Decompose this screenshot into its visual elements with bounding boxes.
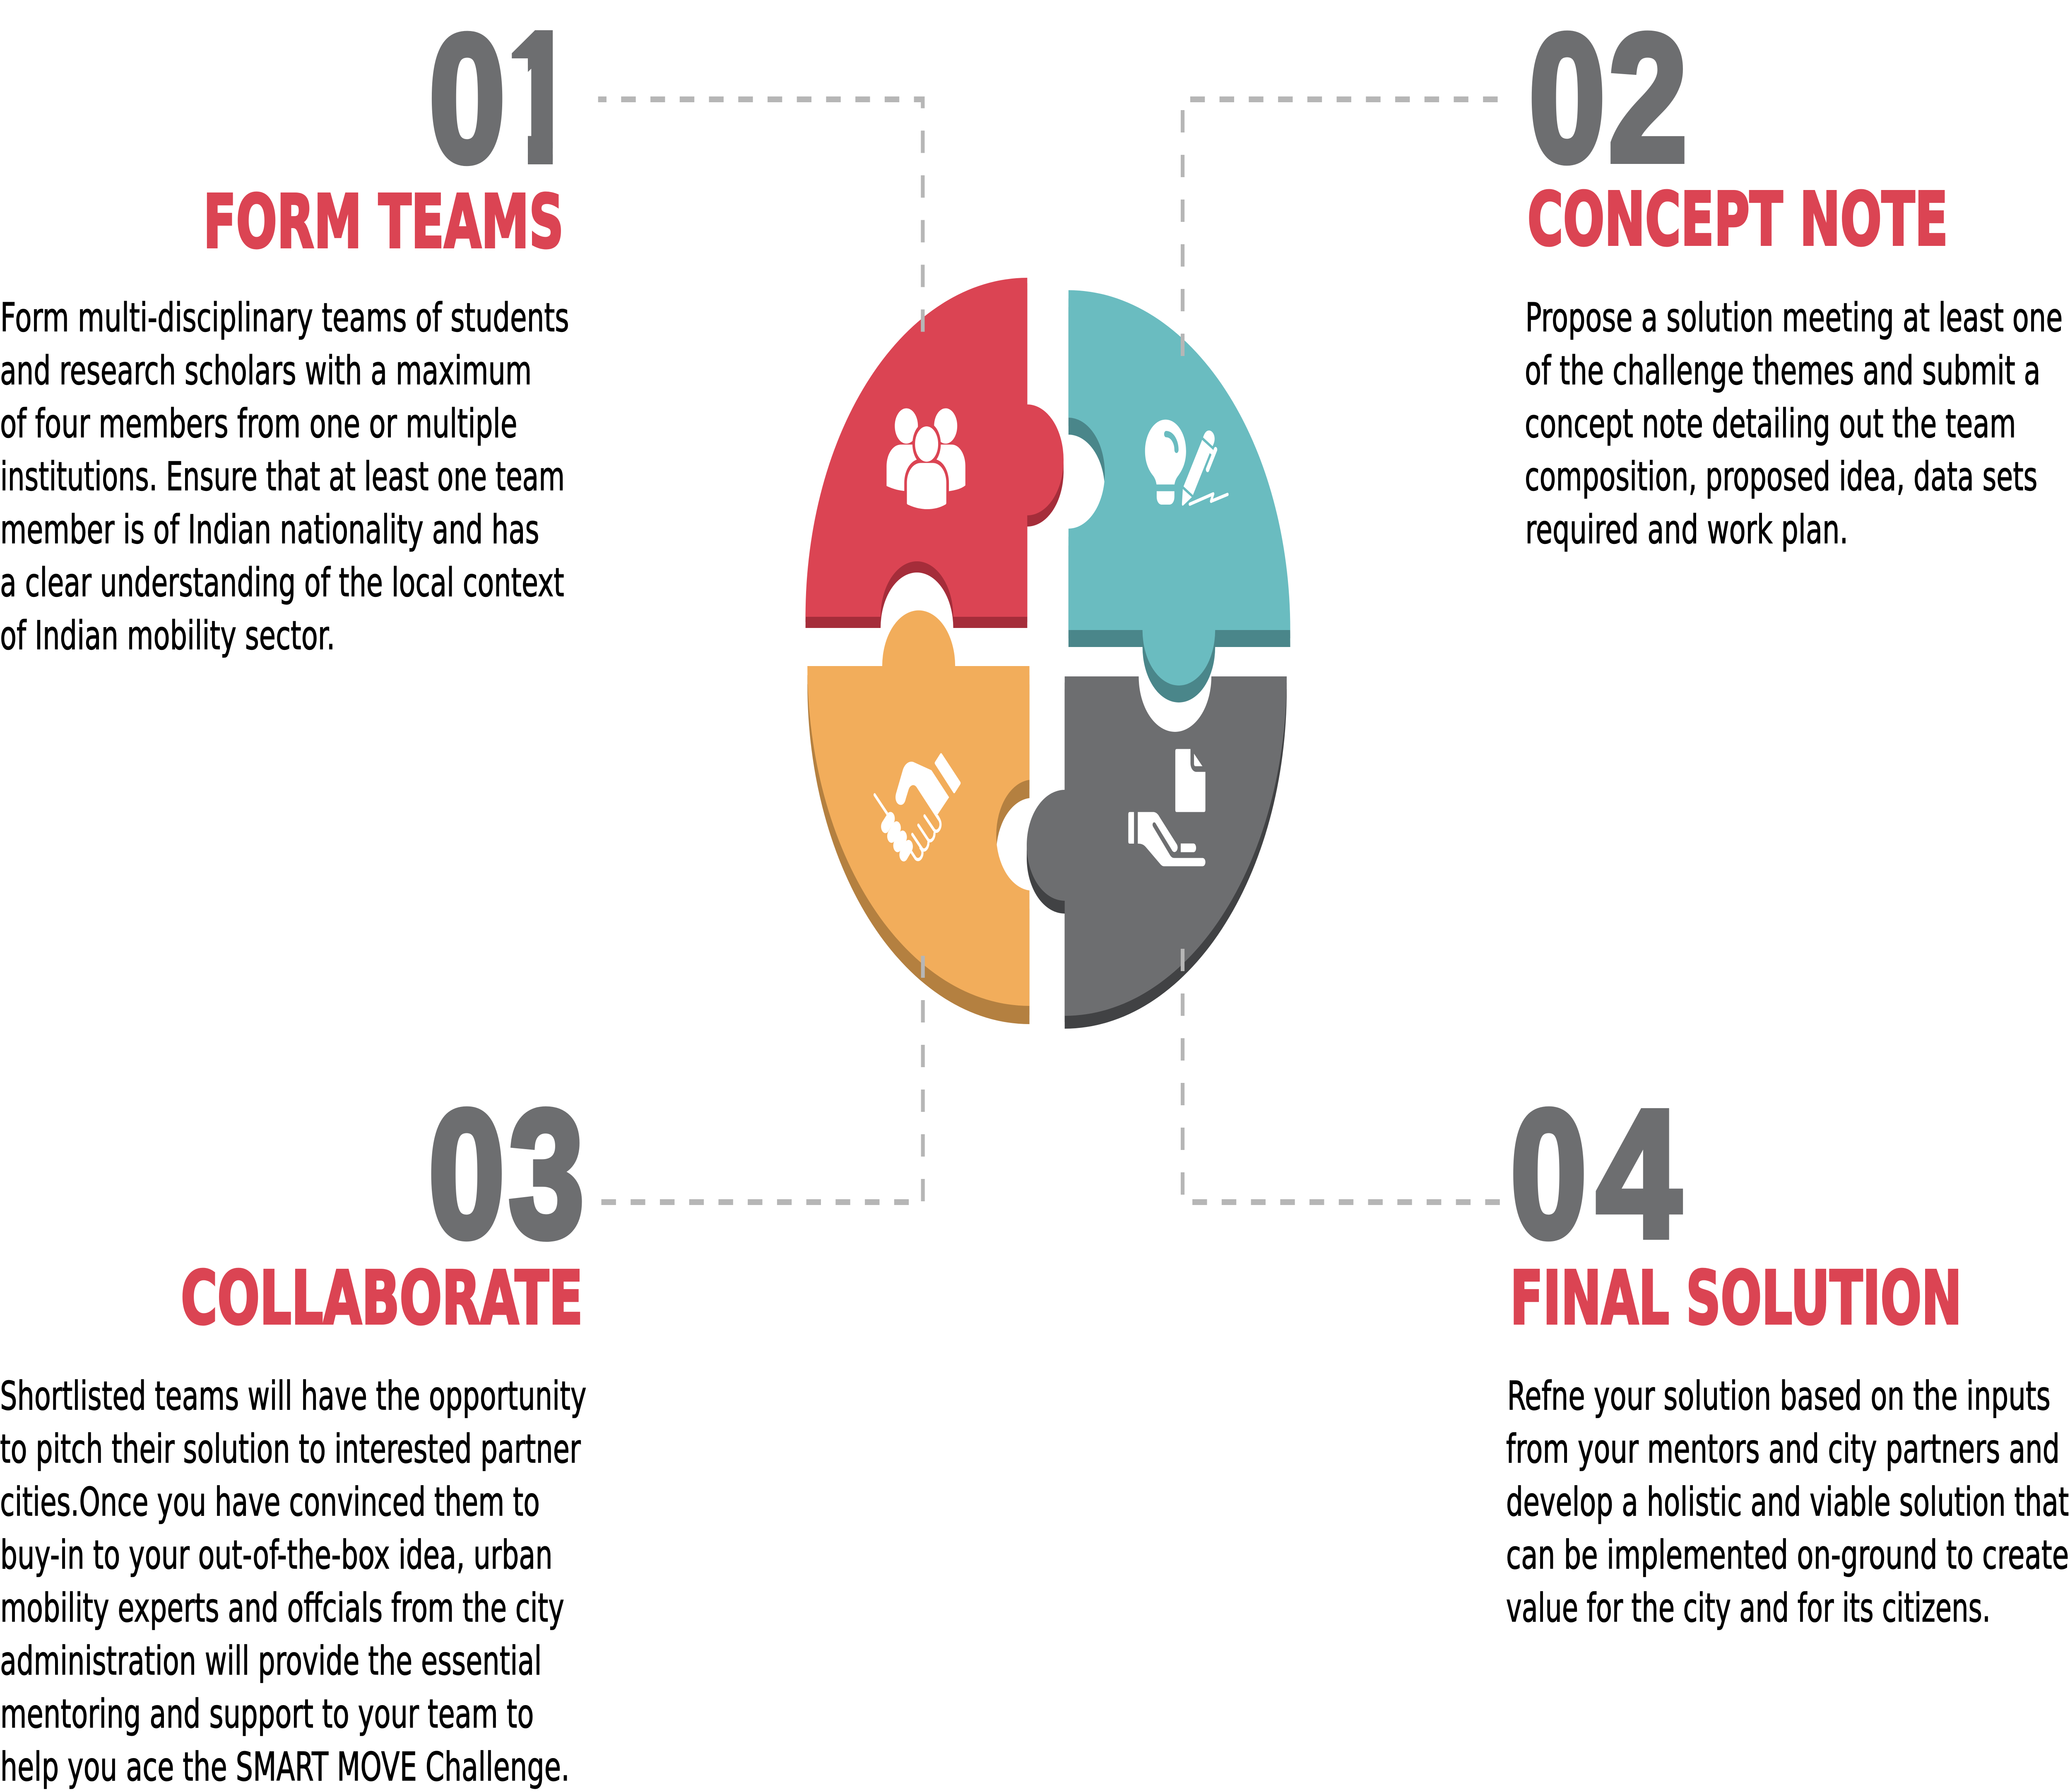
icon: team of three people [886, 408, 965, 509]
text block: collaborate description: mobility experts and offcials from the city [0, 1585, 564, 1631]
heading: collaborate: COLLABORATE [181, 1256, 583, 1341]
number 04: 0 [1511, 1073, 1586, 1275]
number 03: 0 [428, 1073, 505, 1275]
heading: form teams: FORM TEAMS [203, 180, 563, 265]
text block: concept note description: Propose a solution meeting at least one [1525, 294, 2063, 340]
text block: final solution description: value for the city and for its citizens. [1506, 1585, 1991, 1631]
text block: form teams description [0, 294, 569, 658]
text block: final solution description: develop a holistic and viable solution that [1506, 1479, 2069, 1525]
puzzle: grey piece, final solution [1027, 676, 1287, 1029]
text block: collaborate description: Shortlisted teams will have the opportunity [0, 1373, 587, 1419]
text block: concept note description: concept note detailing out the team [1525, 400, 2016, 446]
text block: final solution description: from your mentors and city partners and [1506, 1426, 2060, 1472]
number 01: 1 [508, 0, 573, 199]
dashed connector: step 04 to grey piece [1183, 949, 1500, 1202]
text block: collaborate description: mentoring and support to your team to [0, 1691, 534, 1737]
heading: final solution: FINAL SOLUTION [1510, 1256, 1962, 1341]
text block: concept note description: composition, proposed idea, data sets [1525, 453, 2037, 499]
text block: collaborate description: buy-in to your out-of-the-box idea, urban [0, 1532, 553, 1578]
text block: collaborate description: to pitch their solution to interested partner [0, 1426, 581, 1472]
number 03: 3 [509, 1073, 584, 1275]
dashed connector: step 02 to teal piece [1183, 99, 1498, 356]
text block: final solution description [1506, 1373, 2069, 1631]
text block: form teams description: a clear understanding of the local context [0, 559, 564, 605]
puzzle: teal piece, concept note [1069, 290, 1290, 702]
text block: concept note description [1525, 294, 2063, 552]
text block: form teams description: of Indian mobility sector. [0, 612, 335, 658]
icon: handshake [875, 755, 960, 859]
text block: collaborate description [0, 1373, 587, 1790]
number 02: 2 [1608, 0, 1687, 199]
text block: form teams description: institutions. Ensure that at least one team [0, 453, 565, 499]
number 02 [1529, 0, 1687, 199]
dashed connector: step 03 to orange piece [602, 956, 923, 1202]
number 01: 0 [429, 0, 505, 199]
number 04: 4 [1597, 1073, 1682, 1275]
text block: concept note description: of the challenge themes and submit a [1525, 347, 2041, 393]
heading: concept note: CONCEPT NOTE [1528, 177, 1948, 262]
text block: collaborate description: cities.Once you have convinced them to [0, 1479, 540, 1525]
text block: concept note description: required and work plan. [1525, 506, 1848, 552]
number 04 [1511, 1073, 1682, 1275]
text block: collaborate description: administration will provide the essential [0, 1638, 542, 1684]
text block: form teams description: of four members from one or multiple [0, 400, 518, 446]
icon: hand holding document [1128, 749, 1206, 866]
text block: final solution description: can be implemented on-ground to create [1506, 1532, 2069, 1578]
text block: collaborate description: help you ace the SMART MOVE Challenge. [0, 1744, 570, 1790]
text block: form teams description: and research scholars with a maximum [0, 347, 532, 393]
number 02: 0 [1529, 0, 1605, 199]
number 03 [428, 1073, 584, 1275]
puzzle: red piece, form teams [806, 278, 1064, 628]
text block: final solution description: Refne your solution based on the inputs [1507, 1373, 2051, 1419]
text block: form teams description: member is of Indian nationality and has [0, 506, 539, 552]
text block: form teams description: Form multi-disciplinary teams of students [0, 294, 569, 340]
puzzle: orange piece, collaborate [807, 610, 1030, 1024]
dashed connector: step 01 to red piece [598, 99, 923, 332]
number 01 [431, 30, 553, 166]
icon: light bulb and pen [1145, 420, 1228, 506]
